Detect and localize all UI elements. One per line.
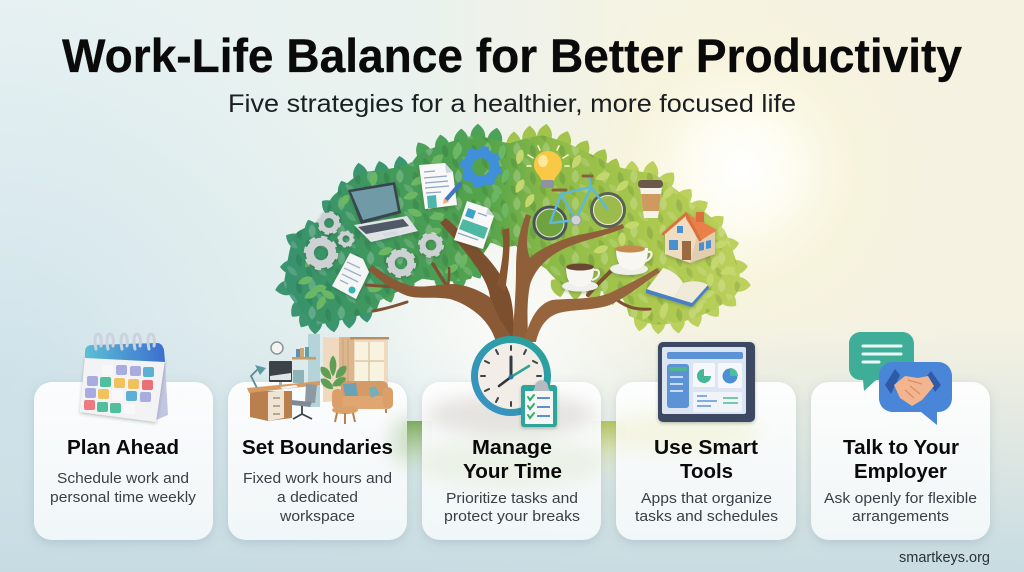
card 3: Manage Your Time [416,382,606,540]
icon: home office [247,334,393,424]
card 3 heading: Manage [472,436,552,459]
card 4 description: tasks and schedules [635,509,778,525]
lower right limb [524,268,660,342]
card 5 heading: Talk to Your [843,436,959,459]
chart card green pie [693,363,715,387]
card 3 description: Prioritize tasks and [446,491,578,507]
card 4 description [635,491,778,525]
wall panel [308,334,320,407]
card 1 description [50,471,197,506]
card 1: Plan Ahead [34,382,213,540]
card 5 heading [843,436,959,483]
card 5: Talk to Your Employer [811,382,990,540]
data list card [693,392,742,412]
card 3 background tints [416,395,606,486]
upper left limb [440,218,514,340]
wall clock [271,342,283,354]
clipboard [521,380,557,427]
card 1 heading: Plan Ahead [67,436,179,459]
centre branch [497,228,510,292]
tree icon: open book [646,268,709,307]
branches and trunk [366,214,660,342]
left leaves [297,144,511,312]
card 4 description: Apps that organize [641,491,772,507]
card 3 description: protect your breaks [444,509,580,525]
card 1 description: Schedule work and [57,471,189,487]
chart card blue pie [718,363,742,388]
card 4 heading [654,436,758,483]
icon: tablet dashboard [658,342,755,422]
tree icon: house [663,212,717,263]
tree icon: takeaway coffee [638,180,663,218]
card 2 description: a dedicated [277,490,358,506]
monitor [269,361,292,386]
icon: clock and checklist [471,336,557,427]
clock hands [499,357,529,386]
source credit: smartkeys.org [899,550,990,566]
tree icon: report document [454,201,494,249]
card 3 heading [463,436,562,483]
tree icon: blue gear [463,149,499,185]
tree icon: light bulb [527,146,569,188]
shelf with books [292,347,316,383]
card 4 background tint [600,412,760,452]
left edge leaves [274,155,410,334]
title: Work-Life Balance for Better Productivity [62,29,962,82]
card 2 heading: Set Boundaries [242,436,393,459]
calendar day cells [84,365,154,414]
card 2 green tint [383,410,407,470]
office chair [291,384,317,419]
icon: chat bubbles with handshake [849,332,952,425]
coffee table [332,406,358,424]
tree [274,123,751,342]
desk lamp [251,365,266,388]
card 2 description: Fixed work hours and [243,471,392,487]
right trunk [512,214,624,342]
card 5 description: Ask openly for flexible [824,491,977,507]
ground hill [402,421,626,483]
tree icon: laptop [348,182,418,242]
sofa [332,381,393,413]
subtitle: Five strategies for a healthier, more focused life [228,90,796,118]
tree icon: certificate document [332,253,369,299]
card 2 description: workspace [279,509,355,525]
tree icon: gears [306,213,442,276]
green speech bubble [849,332,914,391]
card 2: Set Boundaries [228,382,430,540]
tree icon: bicycle [534,176,624,239]
tree icon: document with pencil [419,163,460,209]
card 5 description [824,491,977,525]
canopy leaf texture [284,135,741,325]
card 4: Use Smart Tools [600,382,796,540]
card 4 heading: Use Smart [654,436,758,459]
handshake [885,369,941,406]
canopy [274,123,751,334]
card 1 description: personal time weekly [50,490,197,506]
right leaves [513,148,736,321]
card 2 description [243,471,392,525]
tree icon: coffee cups [562,246,652,292]
twigs [366,264,650,311]
card 5 heading: Employer [854,460,947,483]
card 5 description: arrangements [852,509,949,525]
side panel [667,364,689,408]
clock ticks [481,346,541,406]
card 3 description [444,491,580,525]
card 4 heading: Tools [680,460,733,483]
desk [247,381,320,421]
window and curtain [323,337,389,402]
blue speech bubble [879,362,952,425]
canopy body [284,135,741,325]
icon: calendar [80,334,168,422]
card 3 heading: Your Time [463,460,562,483]
plant [318,356,349,392]
top bar [667,352,743,359]
left limb [368,265,514,342]
calendar rings [95,334,154,349]
right edge leaves [507,123,623,306]
